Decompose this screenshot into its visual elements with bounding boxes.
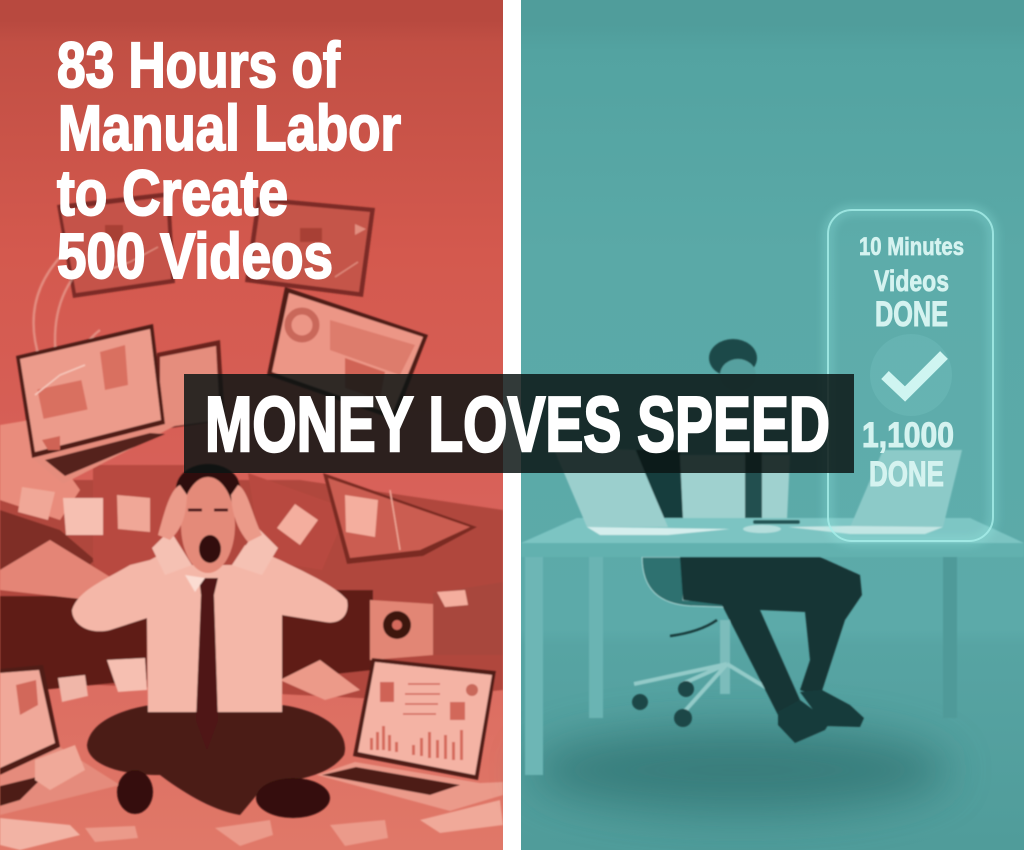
- man: tie: [196, 578, 218, 750]
- floor shadow: [530, 728, 950, 812]
- dark pile behind man: [0, 420, 503, 700]
- laptop top-left: [16, 324, 190, 484]
- chair post and lever: [670, 620, 730, 694]
- artwork: pile of laptops and papers: [0, 192, 503, 850]
- white gutter: [503, 0, 521, 850]
- man: hands: [158, 485, 262, 542]
- panel text: done: DONE: [875, 295, 948, 334]
- shoes: [778, 690, 864, 743]
- man: legs crossed: [87, 705, 345, 815]
- center banner: [184, 374, 854, 473]
- headline line 2: Manual Labor: [58, 92, 401, 164]
- panel: automated (teal): [521, 0, 1024, 850]
- man: shoes: [117, 770, 330, 818]
- hair: [709, 339, 757, 377]
- laptop bottom-left: [0, 665, 120, 815]
- floating tablet right: [245, 197, 375, 297]
- desk: [521, 518, 1024, 775]
- man screaming with hands on head: [72, 464, 348, 818]
- man: eyes: [188, 508, 228, 512]
- man: face: [181, 477, 235, 573]
- panel text: videos: Videos: [874, 265, 949, 298]
- man: shirt and arms: [72, 545, 348, 712]
- chair base: [634, 664, 770, 712]
- man: forearms: [152, 528, 278, 575]
- desk back-left leg: [589, 557, 603, 718]
- panel: manual labor (red): [0, 0, 503, 850]
- motion swirls: [34, 255, 100, 440]
- panel text: 10 minutes: 10 Minutes: [859, 233, 964, 261]
- icon: check in circle: [870, 334, 952, 416]
- laptop left: [553, 447, 730, 535]
- phone and cup: [743, 520, 800, 533]
- panel text: 1,1000: 1,1000: [862, 416, 954, 455]
- headline line 1: 83 Hours of: [57, 29, 341, 101]
- face: [720, 359, 756, 391]
- man: collar: [185, 575, 205, 592]
- chair wheels: [632, 681, 694, 727]
- floating tablet left: [57, 192, 175, 298]
- chair back: [636, 450, 692, 520]
- headline line 3: to Create: [57, 157, 288, 229]
- laptop top-right: [267, 287, 428, 420]
- headline on red panel: [57, 29, 401, 292]
- man: hair: [176, 464, 240, 512]
- man leaning back, yawning: [632, 339, 864, 743]
- scattered sticky notes and papers: [0, 487, 503, 850]
- laptop bottom-right: [317, 658, 503, 811]
- laptop right: [788, 450, 962, 534]
- chair seat shell: [642, 557, 817, 610]
- legs: [680, 557, 862, 715]
- panel text: second done: DONE: [869, 455, 944, 494]
- glowing holographic panel: [828, 210, 993, 541]
- headline line 4: 500 Videos: [57, 220, 333, 292]
- man: open mouth: [199, 535, 221, 563]
- tie: [745, 450, 762, 520]
- shirt: [680, 455, 790, 520]
- laptop behind top-left: [157, 340, 225, 430]
